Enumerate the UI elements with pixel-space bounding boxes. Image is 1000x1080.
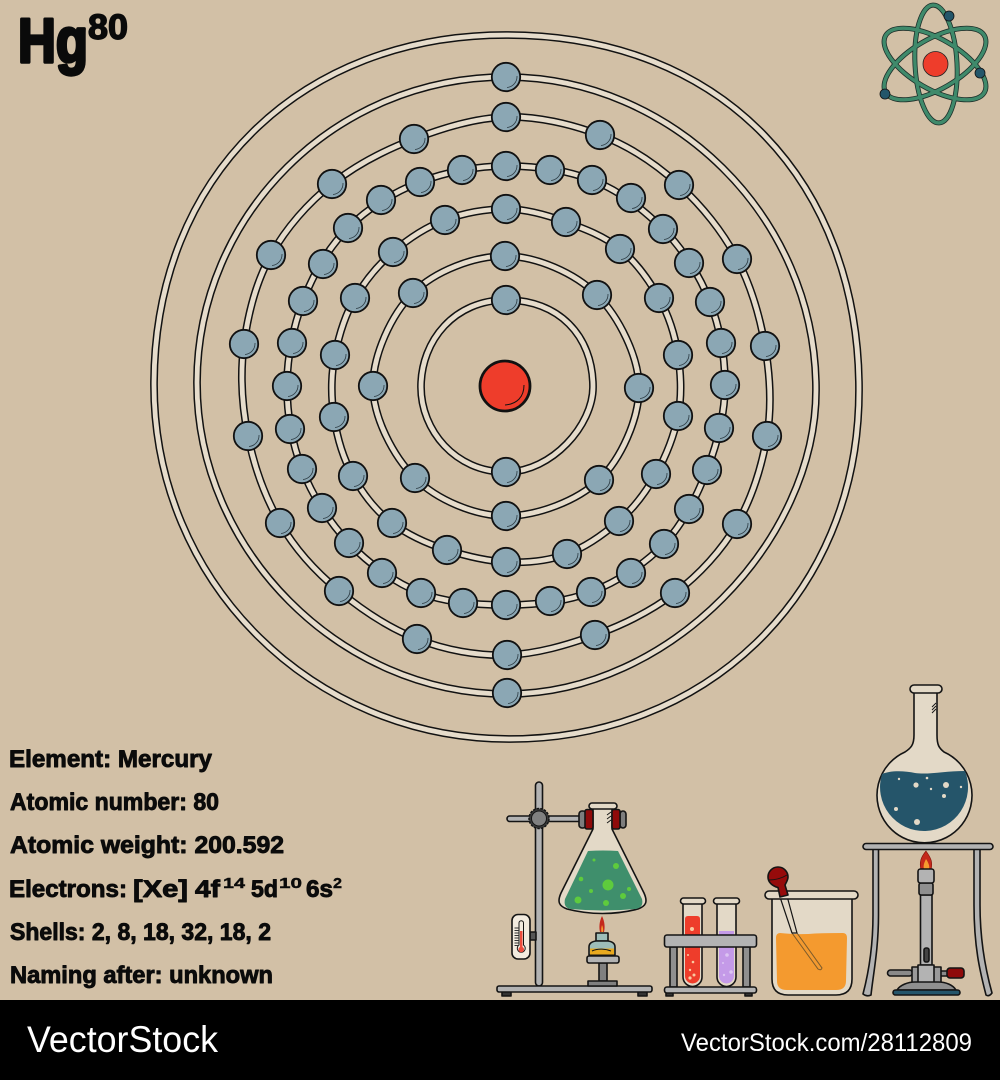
- text block: element facts: Atomic weight: 200.592: [10, 832, 284, 859]
- electrons: shell 5: [230, 103, 781, 669]
- footer bar: [0, 1000, 1000, 1080]
- footer: image url: VectorStock.com/28112809: [681, 1029, 972, 1057]
- electrons: shell 6: [492, 63, 521, 707]
- text block: element facts: [9, 746, 342, 989]
- bunsen burner: [888, 851, 964, 995]
- tripod stand: [863, 844, 993, 996]
- title: element symbol Hg with atomic number: 80: [88, 8, 128, 47]
- text block: element facts: 10: [279, 875, 302, 892]
- text block: element facts: 4f: [195, 876, 221, 903]
- icon: atom: [873, 4, 997, 124]
- thermometer: [512, 914, 536, 959]
- footer: brand name: VectorStock: [27, 1019, 218, 1060]
- shell rings: [154, 35, 859, 739]
- text block: element facts: Shells: 2, 8, 18, 32, 18, 2: [10, 919, 271, 946]
- text block: element facts: Electrons:: [9, 876, 127, 903]
- round-bottom flask with blue liquid: [877, 685, 972, 843]
- electrons: shell 2: [359, 242, 653, 530]
- text block: element facts: Atomic number: 80: [10, 789, 219, 816]
- beaker with orange liquid and dropper: [765, 867, 858, 995]
- electrons: shell 3: [320, 195, 692, 576]
- test tube rack with red and purple tubes: [664, 898, 756, 996]
- text block: element facts: Element: Mercury: [9, 746, 213, 773]
- text block: element facts: 5d: [251, 876, 278, 903]
- text block: element facts: 2: [333, 875, 342, 892]
- text block: element facts: Naming after: unknown: [10, 962, 273, 989]
- text block: element facts: 14: [223, 875, 246, 892]
- electrons: shell 4: [273, 152, 739, 619]
- text block: element facts: 6s: [306, 876, 333, 903]
- spirit burner: [587, 916, 619, 986]
- conical flask with green liquid: [559, 803, 646, 914]
- retort stand with clamp: [497, 782, 652, 996]
- nucleus: [480, 361, 530, 411]
- text block: element facts: [Xe]: [133, 876, 188, 903]
- electrons: shell 1: [492, 286, 520, 486]
- title: element symbol Hg with atomic number: Hg: [18, 7, 88, 76]
